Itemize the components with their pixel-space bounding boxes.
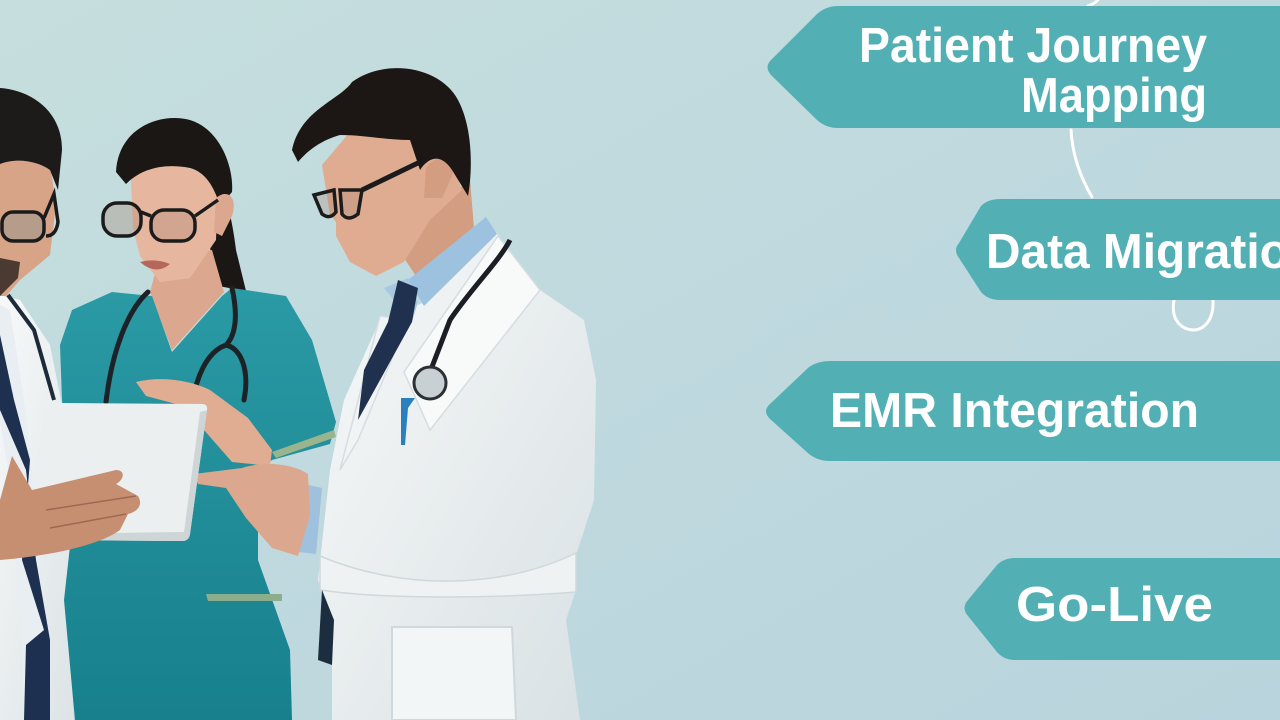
pen: [401, 398, 415, 445]
pocket: [206, 594, 282, 601]
stethoscope: [414, 240, 510, 399]
arrow: Go-Live: [964, 558, 1280, 660]
hair: [116, 118, 232, 206]
coat belt: [320, 553, 576, 597]
hand: [194, 464, 310, 556]
head: [0, 150, 56, 296]
arrow: Go-Live: Go-Live: [1016, 578, 1213, 632]
lips: [140, 260, 170, 270]
collar: [384, 217, 497, 322]
tablet: [32, 403, 207, 541]
ponytail: [200, 150, 246, 291]
tie: [358, 280, 418, 420]
stethoscope: [106, 288, 246, 402]
shirt and tie: [0, 295, 54, 720]
figure: left doctor: [0, 88, 92, 720]
neck: [150, 250, 224, 350]
hand holding tablet: [0, 456, 140, 560]
figure: right doctor: [194, 68, 596, 720]
coat pocket: [392, 627, 516, 720]
glasses: [314, 162, 420, 218]
shirt cuff: [298, 484, 322, 554]
neck: [392, 180, 474, 282]
arrow: Data Migration: [956, 199, 1280, 300]
thin connector curves: [1071, 0, 1213, 330]
ear: [424, 157, 453, 198]
glasses: [103, 200, 218, 241]
figure: nurse: [60, 118, 336, 720]
lapels: [340, 236, 540, 470]
arrow: Patient Journey Mapping: Mapping: [1021, 69, 1207, 123]
arrow: Patient Journey Mapping: [768, 6, 1280, 128]
arrow: EMR Integration: EMR Integration: [830, 384, 1199, 438]
sleeve band: [272, 430, 336, 458]
dark trousers strip: [318, 590, 334, 665]
beard: [0, 258, 20, 296]
ear: [214, 194, 234, 236]
scrubs: [60, 288, 336, 720]
hand and arm: [136, 379, 272, 466]
face: [131, 165, 218, 282]
coat: [0, 295, 92, 720]
glasses: [2, 194, 58, 241]
arrow: EMR Integration: [766, 361, 1280, 461]
hair: [0, 88, 62, 190]
hair: [292, 68, 471, 196]
coat: [318, 232, 596, 720]
arrow: Patient Journey Mapping: Patient Journey: [859, 19, 1207, 73]
face: [322, 120, 462, 276]
